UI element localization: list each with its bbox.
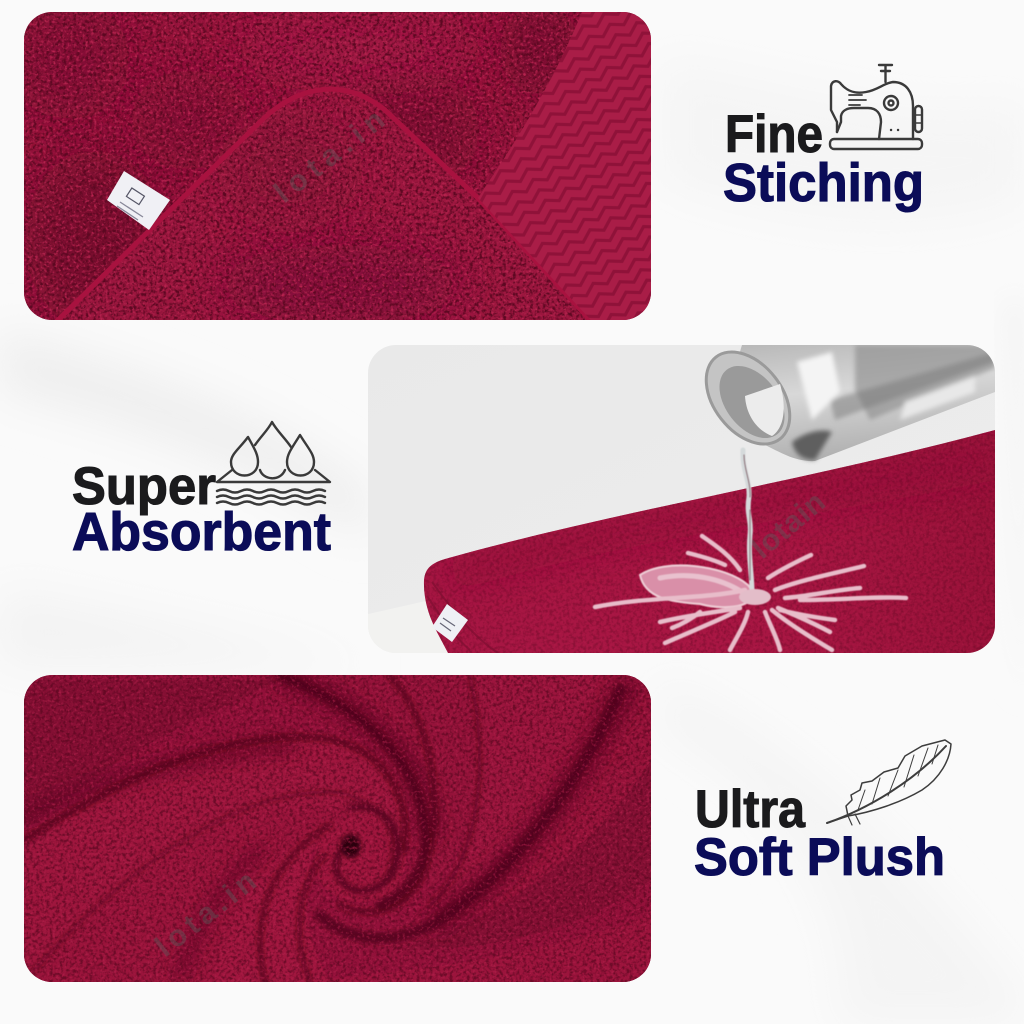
icon: feather: [827, 740, 951, 825]
table surface: [368, 600, 500, 653]
care label: [107, 171, 170, 230]
herringbone border: [478, 12, 660, 330]
heading: Super Absorbent: Super: [72, 457, 216, 516]
heading: Fine Stiching: Stiching: [723, 153, 924, 213]
towel label: [432, 604, 468, 642]
panel: plush swirl towel photo: lota.in: [149, 862, 267, 964]
icon: water drops: [217, 422, 330, 504]
heading: Ultra Soft Plush: Soft Plush: [694, 828, 945, 887]
heading: Super Absorbent: Absorbent: [72, 502, 331, 562]
heading: Ultra Soft Plush: [694, 780, 945, 887]
folded corner: [62, 93, 465, 320]
icon: sewing machine: [830, 65, 922, 149]
panel: fine stitching towel photo: [10, 0, 660, 330]
towel: [424, 430, 995, 653]
bottle: [704, 345, 995, 463]
panel: water absorbency photo: [368, 336, 995, 653]
swirl shadows: [24, 676, 620, 982]
heading: Super Absorbent: [72, 457, 331, 562]
panel: plush swirl towel photo: [24, 675, 651, 982]
watermark: lotain: [745, 485, 832, 565]
heading: Fine Stiching: Fine: [725, 105, 823, 164]
water stream and splash: [595, 450, 906, 650]
heading: Fine Stiching: [723, 105, 924, 213]
swirl folds: [24, 680, 280, 830]
watermark: lota.in: [268, 99, 397, 210]
heading: Ultra Soft Plush: Ultra: [695, 780, 805, 839]
broad soft shading of the folds: [24, 676, 625, 975]
